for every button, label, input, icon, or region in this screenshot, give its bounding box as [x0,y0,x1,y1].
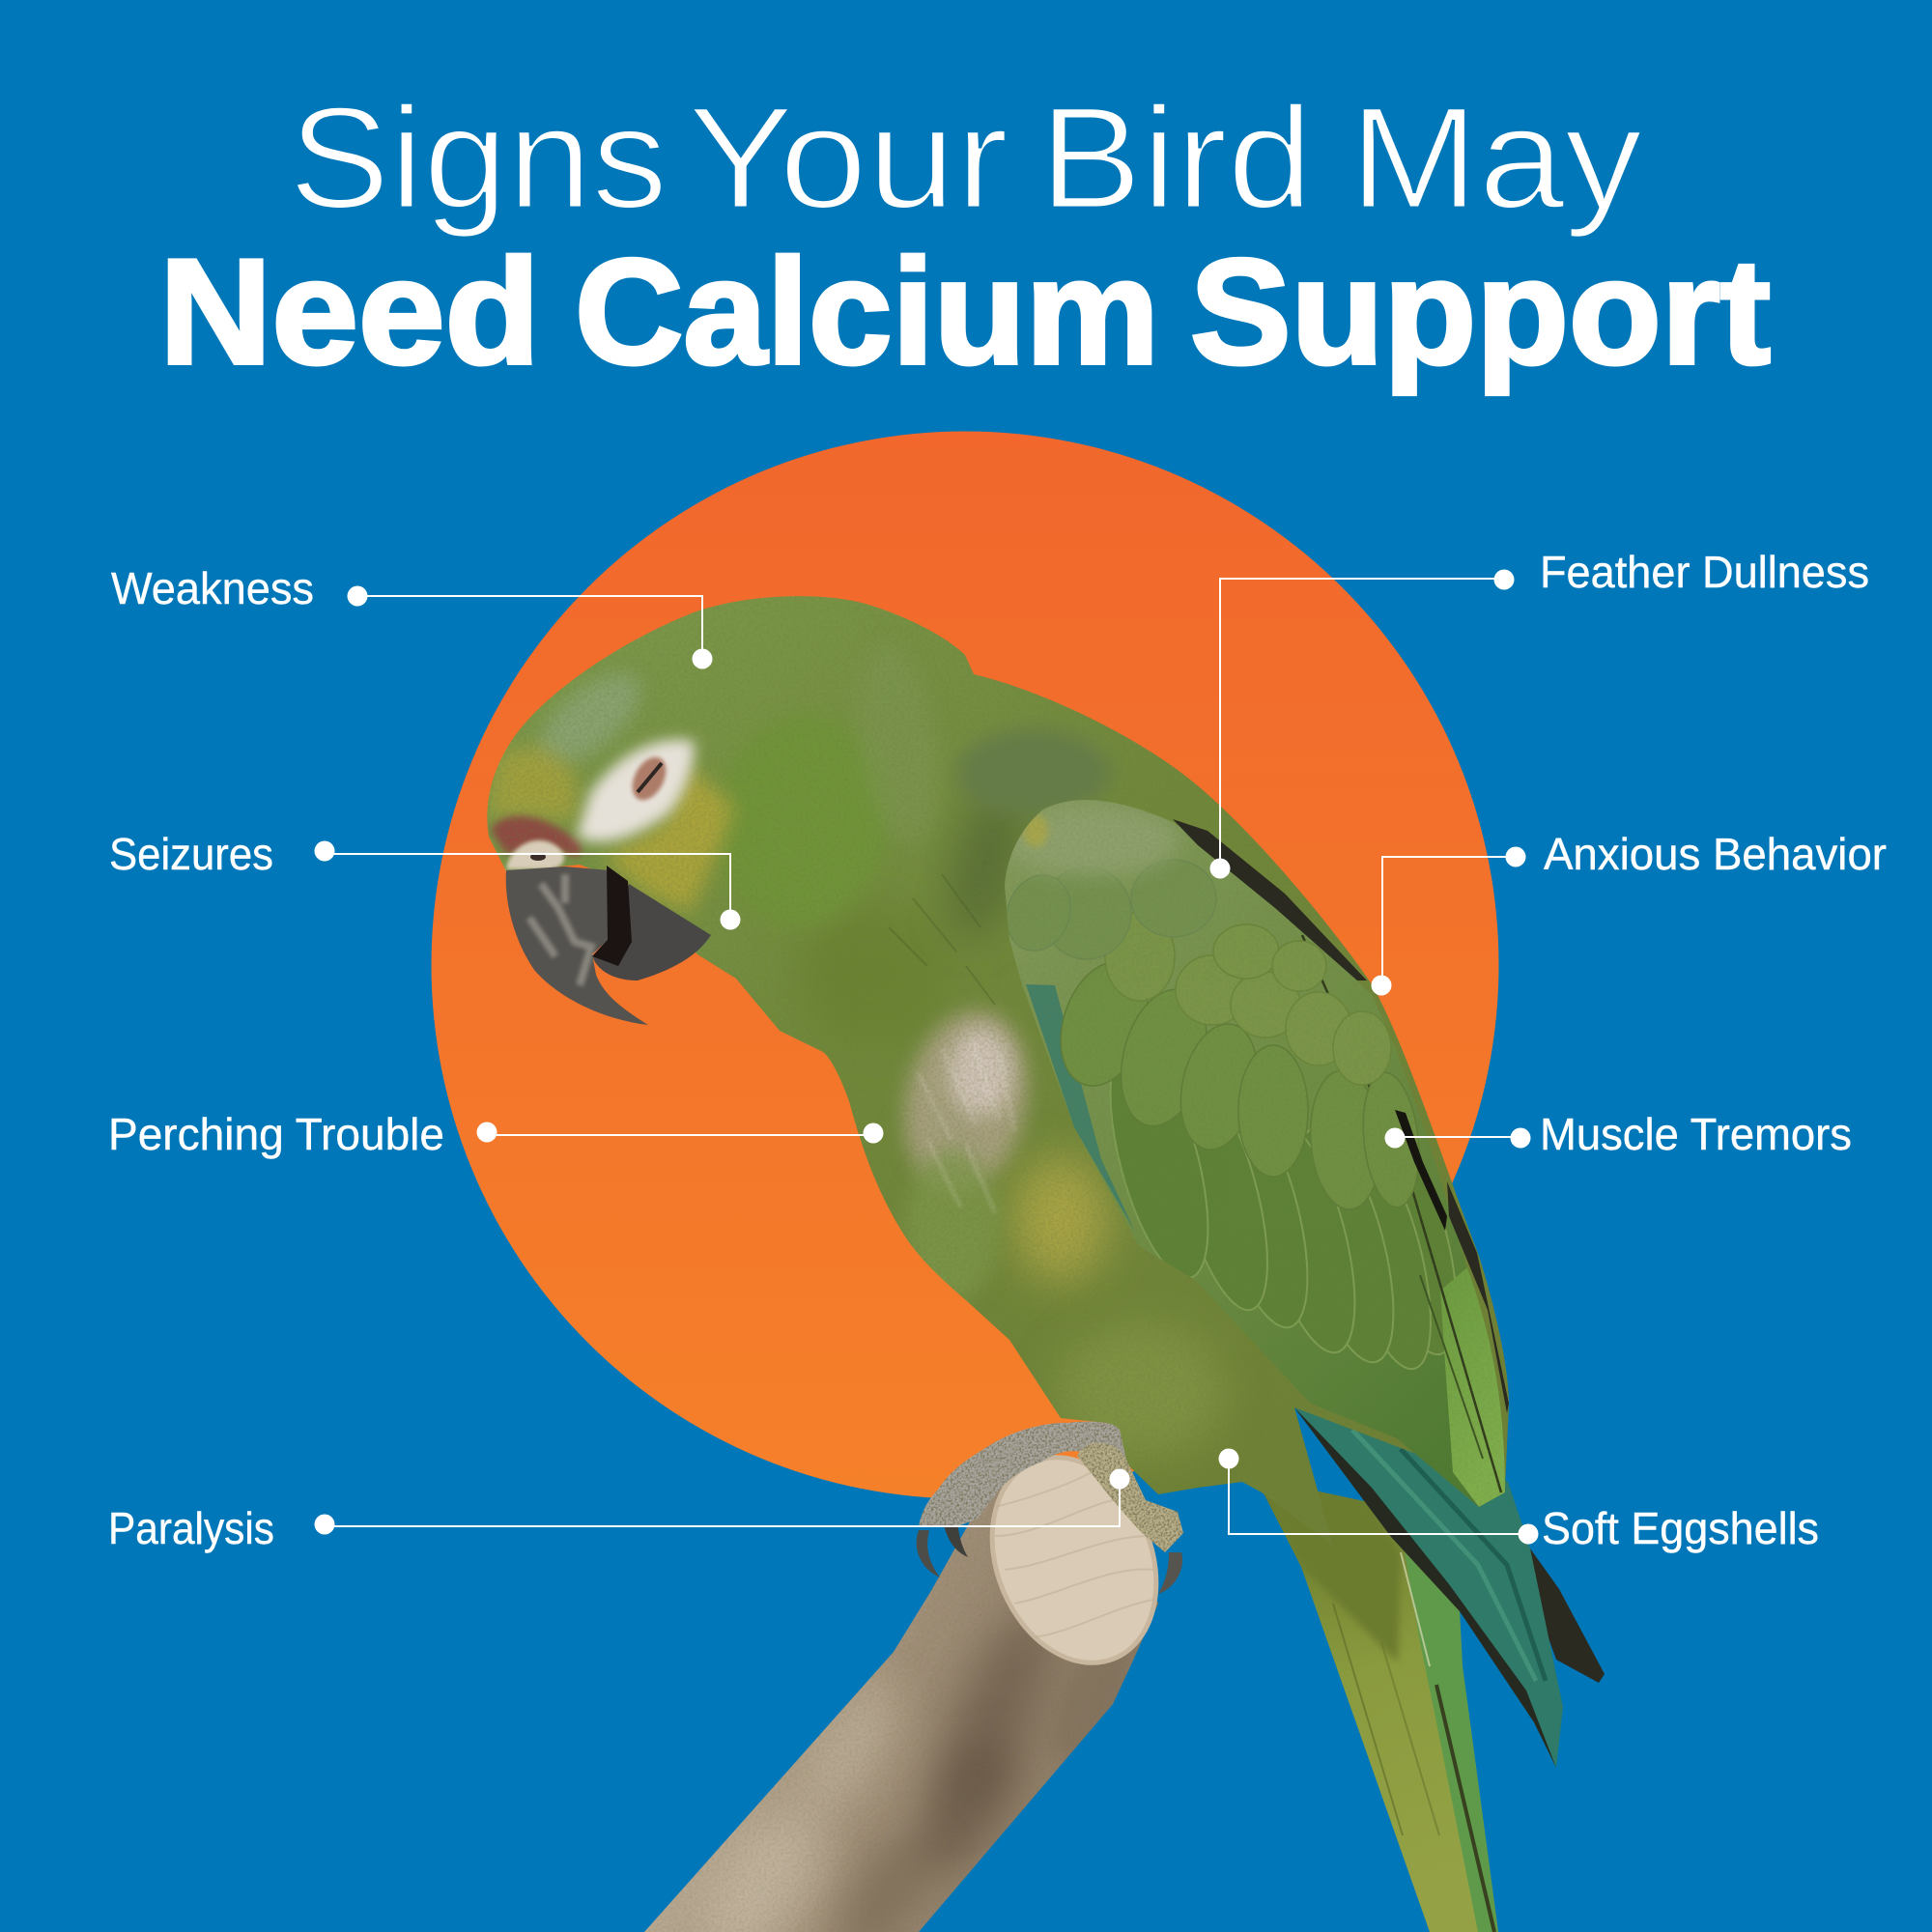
dark lower outer edge [1447,1181,1509,1413]
black flight feather [1530,1548,1605,1683]
title line 1 [289,76,1642,239]
callout: Weakness [111,563,713,668]
title line 1: Bird [1039,76,1313,239]
body shading and colour patches [473,580,1526,1546]
foot [917,1422,1183,1594]
callout: Perching Trouble [108,1109,883,1159]
title line 1: Your [688,76,1009,239]
title line 1: Signs [289,76,668,239]
title line 2: Need [159,228,540,395]
dark upper wing edge [1173,819,1367,980]
bright wing tip [1440,1256,1505,1507]
callout: Perching Trouble: Perching Trouble [108,1109,444,1159]
title line 1: May [1350,76,1642,239]
shoulder highlight [1005,806,1179,875]
body [487,596,1509,1546]
title line 2: Calcium [575,228,1159,395]
callout: Paralysis: Paralysis [108,1503,274,1553]
beak gap [592,866,632,966]
callout: Muscle Tremors [1385,1109,1852,1159]
callout: Weakness: Weakness [111,563,314,613]
eye [625,752,673,806]
textured calcium toe [1077,1443,1183,1552]
beak markings [529,874,591,985]
orange circle [431,431,1499,1499]
dark feather slit [1395,1110,1447,1231]
branch cut face [989,1455,1159,1665]
callout: Seizures: Seizures [109,829,273,879]
callout: Feather Dullness: Feather Dullness [1540,547,1869,597]
chest feather wisps [918,1038,1014,1212]
primary feathers [1109,1074,1456,1370]
perch branch [644,1455,1159,1932]
upper beak [506,867,648,1025]
callout: Muscle Tremors: Muscle Tremors [1540,1109,1852,1159]
wing [995,792,1517,1517]
teal inner wing edge [1026,984,1135,1232]
title [159,76,1771,395]
callout: Anxious Behavior: Anxious Behavior [1544,829,1887,879]
title line 2 [159,228,1771,395]
thin feather line [1302,935,1501,1492]
nostril cere [506,840,564,869]
claws [917,1530,940,1577]
lower beak [592,884,711,980]
callout: Soft Eggshells: Soft Eggshells [1542,1503,1819,1553]
callout: Paralysis [108,1468,1130,1553]
grey toes [919,1422,1126,1526]
callout: Soft Eggshells [1219,1449,1819,1553]
tail feathers [1264,1492,1498,1932]
title line 2: Support [1190,228,1771,395]
teal flight feathers [1195,1280,1563,1768]
eye patch [577,740,695,841]
parrot [473,580,1605,1932]
callout: Seizures [109,829,740,929]
callout: Anxious Behavior [1372,829,1887,995]
callout: Feather Dullness [1209,547,1869,879]
covert feathers [1060,963,1420,1208]
